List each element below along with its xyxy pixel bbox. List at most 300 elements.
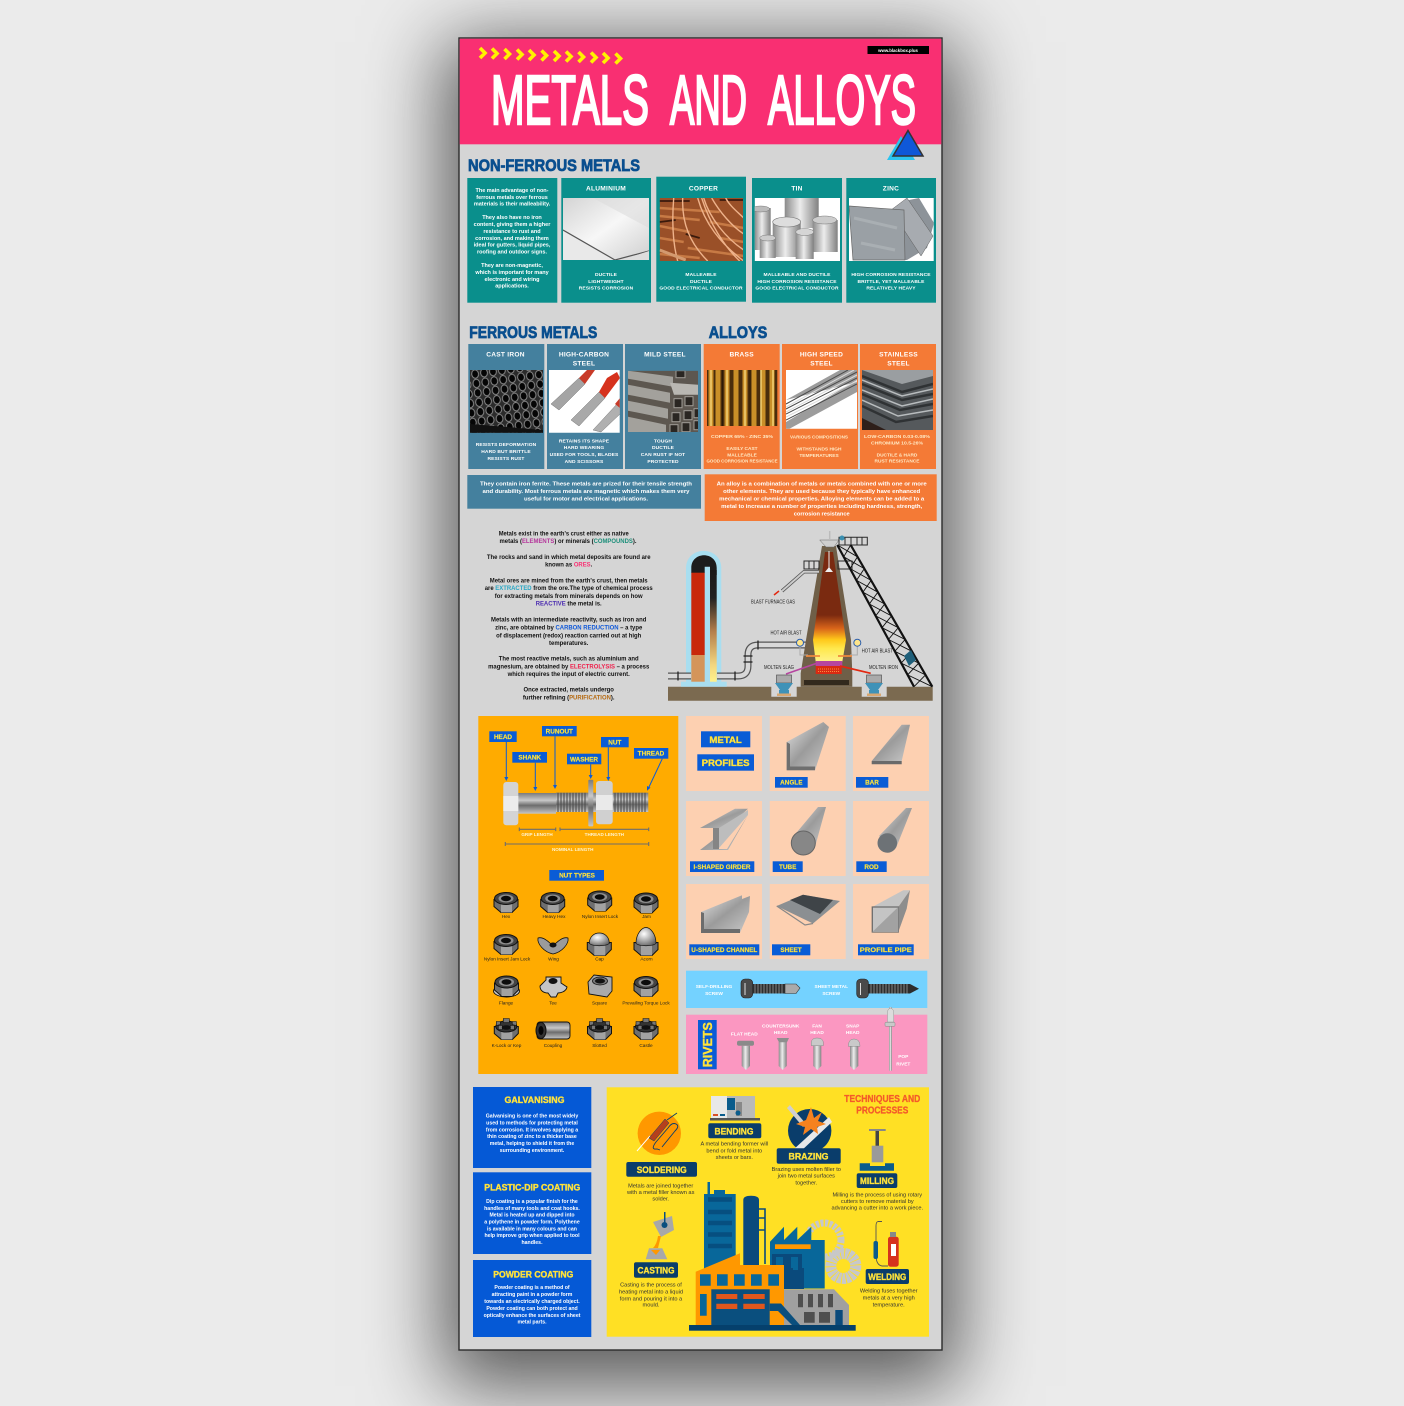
- text block: milling: [832, 1192, 924, 1212]
- label: runout: RUNOUT: [546, 728, 573, 736]
- label: shank: [512, 752, 547, 763]
- bolt illustration: [503, 780, 648, 826]
- url badge: www.blackbox.plus: [877, 48, 918, 53]
- nut: nylon insert lock: Nylon Insert Lock: [582, 914, 619, 919]
- header banner: [460, 39, 941, 144]
- nut: prevailing torque lock: [622, 976, 670, 1006]
- nut: slotted: [588, 1018, 612, 1048]
- text block: extraction of metals: known as ORES.: [545, 562, 593, 568]
- photo: copper wire: [660, 198, 743, 261]
- panel: alloy description: mechanical or chemical properties. Alloying elements can be added to a: [719, 497, 925, 503]
- panel: plastic-dip coating: a polythene in powder form. Polythene: [484, 1220, 580, 1226]
- rivet: fan head: FAN: [812, 1023, 822, 1029]
- panel: non-ferrous intro: corrosion, and making them: [475, 236, 549, 242]
- text block: extraction of metals: zinc, are obtained by CARBON REDUCTION – a type: [495, 625, 643, 631]
- panel: copper: [656, 177, 746, 302]
- nut: nylon insert jam lock: Nylon Insert Jam Lock: [484, 956, 531, 962]
- panel: cast iron: [468, 344, 544, 469]
- text block: brazing: [772, 1167, 841, 1186]
- panel: mild steel: CAN RUST IF NOT: [641, 452, 685, 458]
- text block: casting: [619, 1282, 683, 1309]
- text block: extraction of metals: [485, 531, 653, 701]
- panel: non-ferrous intro: electronic and wiring: [484, 277, 540, 283]
- text block: casting: heating metal into a liquid: [619, 1289, 683, 1295]
- panel: plastic-dip coating: [473, 1172, 591, 1254]
- panel: zinc: ZINC: [883, 186, 899, 192]
- text block: extraction of metals: The most reactive metals, such as aluminium and: [499, 656, 639, 662]
- panel: high-carbon steel: HIGH-CARBON: [559, 351, 609, 358]
- label: runout: [542, 726, 577, 736]
- rivet: countersunk head: [762, 1023, 800, 1070]
- process: casting: [634, 1262, 678, 1278]
- panel: high speed steel: HIGH SPEED: [800, 351, 843, 358]
- text block: extraction of metals: which requires the input of electric current.: [507, 672, 630, 678]
- process: soldering: [626, 1162, 697, 1177]
- label: thread length: THREAD LENGTH: [585, 832, 625, 837]
- text block: bending: [700, 1142, 768, 1161]
- panel: copper: GOOD ELECTRICAL CONDUCTOR: [659, 286, 743, 292]
- panel: stainless steel: STEEL: [887, 361, 910, 368]
- photo: stainless sheets: [862, 370, 933, 430]
- rivet: fan head: HEAD: [810, 1030, 824, 1036]
- panel: ferrous description: [467, 475, 701, 509]
- text block: bending: sheets or bars.: [716, 1155, 753, 1161]
- nut: wing: [538, 938, 568, 962]
- panel: cast iron: RESISTS DEFORMATION: [476, 442, 537, 448]
- heading: techniques and processes: [844, 1094, 920, 1116]
- process: milling: MILLING: [860, 1176, 894, 1187]
- panel: powder coating: POWDER COATING: [493, 1270, 573, 1281]
- title: METALS: [491, 61, 649, 139]
- panel: aluminium: ALUMINIUM: [586, 186, 626, 192]
- heading: non-ferrous metals: NON-FERROUS METALS: [468, 156, 640, 175]
- nut: acorn: [634, 928, 658, 962]
- text block: extraction of metals: are EXTRACTED from the ore.The type of chemical process: [485, 586, 653, 592]
- nut: heavy hex: [541, 892, 566, 919]
- nut: k-lock or kep: K-Lock or Kep: [492, 1043, 522, 1048]
- text block: welding: [860, 1289, 918, 1308]
- nut: tee: [540, 977, 567, 1006]
- blue sawtooth factory: [770, 1227, 825, 1289]
- panel: mild steel: [625, 344, 701, 469]
- panel: brass: GOOD CORROSION RESISTANCE: [706, 458, 778, 464]
- panel: non-ferrous intro: materials is their malleability.: [474, 202, 551, 208]
- profile: i-shaped girder: [686, 801, 762, 876]
- label: sheet metal screw: SHEET METAL: [815, 984, 848, 990]
- gears: [807, 1223, 856, 1278]
- text block: extraction of metals: temperatures.: [549, 641, 589, 647]
- panel: galvanising: GALVANISING: [504, 1095, 564, 1106]
- panel: ferrous description: useful for motor and electrical applications.: [524, 497, 648, 503]
- label: sheet metal screw: [815, 984, 848, 997]
- text block: milling: advancing a cutter into a work piece.: [832, 1206, 924, 1212]
- process: casting: CASTING: [638, 1266, 674, 1277]
- label: self-drilling screw: SELF-DRILLING: [696, 984, 733, 990]
- photo: chisels: [549, 370, 620, 433]
- nut: square: [588, 975, 612, 1006]
- panel: alloy description: [705, 474, 937, 521]
- silo: [743, 1196, 765, 1265]
- skip car: [904, 650, 916, 666]
- panel: ferrous description: and durability. Most ferrous metals are magnetic which makes them very: [482, 489, 690, 495]
- panel: plastic-dip coating: Dip coating is a popular finish for the: [486, 1199, 578, 1205]
- rivet: pop rivet: POP: [898, 1054, 909, 1060]
- icon: sheet metal screw: [857, 979, 919, 998]
- panel: high speed steel: VARIOUS COMPOSITIONS: [790, 434, 849, 440]
- panel: tin: [752, 178, 842, 303]
- icon: soldering iron: [637, 1112, 681, 1155]
- rivet: fan head: [810, 1023, 824, 1070]
- nut: square: Square: [592, 1000, 607, 1006]
- heading: techniques and processes: PROCESSES: [856, 1105, 909, 1116]
- rivet: countersunk head: HEAD: [774, 1030, 788, 1036]
- heading: alloys: ALLOYS: [709, 323, 767, 342]
- panel: high speed steel: STEEL: [810, 361, 833, 368]
- panel: alloy description: corrosion resistance: [794, 511, 850, 517]
- label: metal: METAL: [709, 735, 742, 746]
- text block: casting: form and pouring it into a: [620, 1296, 683, 1302]
- panel: powder coating: metal parts.: [517, 1320, 547, 1326]
- panel: non-ferrous intro: which is important for many: [474, 270, 550, 276]
- icon: milling machine: [860, 1129, 894, 1171]
- text block: casting: Casting is the process of: [620, 1282, 682, 1288]
- panel: powder coating: Powder coating is a method of: [494, 1285, 570, 1291]
- skip hoist truss: [837, 545, 932, 687]
- text block: extraction of metals: REACTIVE the metal is.: [536, 602, 602, 608]
- text block: milling: Milling is the process of using rotary: [832, 1192, 922, 1198]
- nut: hex: [494, 892, 518, 919]
- panel: non-ferrous intro: content, giving them a higher: [474, 222, 551, 228]
- panel: aluminium: LIGHTWEIGHT: [588, 279, 624, 285]
- label: profiles: PROFILES: [702, 758, 750, 769]
- label: head: [489, 731, 517, 742]
- panel: aluminium: [561, 178, 651, 303]
- rivet: snap head: HEAD: [846, 1030, 860, 1036]
- text block: extraction of metals: for extracting metals from minerals depends on how: [495, 594, 643, 600]
- panel: non-ferrous intro: resistance to rust and: [483, 229, 541, 235]
- panel: plastic-dip coating: handles.: [521, 1240, 543, 1246]
- text block: extraction of metals: Metal ores are mined from the earth's crust, then metals: [490, 578, 648, 584]
- text block: casting: mould.: [643, 1303, 660, 1309]
- panel: brass: COPPER 65% - ZINC 35%: [711, 434, 774, 440]
- heading: rivets: RIVETS: [700, 1022, 715, 1067]
- nut: slotted: Slotted: [592, 1043, 607, 1048]
- text block: soldering: solder.: [652, 1197, 669, 1203]
- panel: galvanising: thin coating of zinc to a thicker base: [487, 1134, 577, 1140]
- panel: brass: EASILY CAST: [726, 446, 758, 452]
- icon: triangles: [887, 130, 923, 160]
- text block: brazing: together.: [795, 1180, 818, 1186]
- base strip: [689, 1325, 856, 1331]
- connecting walkway: [770, 1304, 800, 1325]
- photo: aluminium sheet: [563, 198, 649, 260]
- label: bar: BAR: [865, 780, 879, 786]
- nut: jam: Jam: [642, 914, 651, 919]
- panel: non-ferrous intro: They are non-magnetic,: [481, 263, 543, 269]
- label: tube: TUBE: [779, 864, 797, 871]
- nut: tee: Tee: [549, 1000, 557, 1006]
- text block: soldering: Metals are joined together: [628, 1183, 693, 1189]
- panel: plastic-dip coating: Metal is heated up and dipped into: [489, 1212, 575, 1218]
- illustration: factory: [689, 1182, 856, 1331]
- panel: mild steel: DUCTILE: [652, 445, 675, 451]
- dimension lines: [505, 828, 649, 846]
- panel: powder coating: attracting paint in a powder form: [492, 1292, 573, 1298]
- icon: casting ladle: [646, 1212, 674, 1259]
- label: head: HEAD: [494, 734, 512, 741]
- arrows: leader lines: [504, 736, 662, 791]
- nut: castle: Castle: [639, 1043, 653, 1048]
- panel: alloy description: metal to increase a number of properties including hardness, strength,: [721, 504, 923, 510]
- process: bending: BENDING: [714, 1126, 754, 1137]
- panel: powder coating: towards an electrically charged object.: [484, 1299, 580, 1305]
- process: soldering: SOLDERING: [637, 1165, 687, 1176]
- nut: castle: [634, 1018, 658, 1048]
- panel: high-carbon steel: STEEL: [573, 361, 595, 368]
- nut: coupling: Coupling: [544, 1043, 563, 1048]
- rivet: flat head: [731, 1031, 758, 1070]
- profile: bar: [853, 716, 929, 791]
- orange building: [696, 1253, 784, 1325]
- panel: alloy description: other elements. They are used because they typically have enhanced: [723, 489, 921, 495]
- label: rod: ROD: [864, 864, 879, 871]
- rivet: pop rivet: RIVET: [896, 1061, 910, 1067]
- label: thread: THREAD: [638, 751, 665, 758]
- panel: ferrous description: They contain iron ferrite. These metals are prized for their tensile strength: [480, 481, 692, 487]
- label: self-drilling screw: [696, 984, 733, 997]
- diagram: blast furnace: [668, 531, 933, 701]
- panel: galvanising: used to methods for protecting metal: [486, 1120, 578, 1126]
- text block: bending: A metal bending former will: [700, 1142, 768, 1148]
- molten slag and iron runners: [786, 664, 816, 674]
- panel: bolt anatomy and nut types: [478, 716, 678, 1074]
- panel: brass: BRASS: [730, 351, 754, 358]
- panel: stainless steel: [860, 344, 936, 469]
- text block: brazing: Brazing uses molten filler to: [772, 1167, 841, 1173]
- nut: coupling: [536, 1022, 570, 1048]
- panel: plastic-dip coating: is available in many colours and can: [487, 1226, 577, 1232]
- nut: flange: Flange: [499, 1000, 514, 1006]
- label: blast furnace gas: BLAST FURNACE GAS: [751, 599, 796, 605]
- text block: bending: bend or fold metal into: [706, 1148, 762, 1154]
- label: nut types: NUT TYPES: [559, 873, 596, 880]
- text block: soldering: with a metal filler known as: [626, 1190, 695, 1196]
- label: nut types: [549, 870, 604, 881]
- panel: cast iron: CAST IRON: [486, 351, 525, 358]
- text block: extraction of metals: magnesium, are obtained by ELECTROLYSIS – a process: [488, 664, 650, 670]
- label: i-shaped girder: I-SHAPED GIRDER: [694, 864, 751, 871]
- label: nut: [601, 737, 629, 747]
- icon: brazing: [787, 1105, 832, 1152]
- panel: high-carbon steel: AND SCISSORS: [565, 459, 604, 465]
- nut: heavy hex: Heavy Hex: [543, 914, 566, 919]
- process: welding: [866, 1269, 909, 1284]
- panel: tin: GOOD ELECTRICAL CONDUCTOR: [755, 286, 839, 292]
- label: washer: [567, 754, 601, 764]
- label: angle: ANGLE: [780, 780, 803, 786]
- label: washer: WASHER: [570, 756, 598, 763]
- panel: mild steel: TOUGH: [654, 438, 672, 444]
- panel: stainless steel: DUCTILE & HARD: [877, 452, 918, 458]
- profile: sheet: [770, 884, 846, 959]
- panel: stainless steel: LOW-CARBON 0.03-0.08%: [864, 434, 931, 440]
- rivet: snap head: SNAP: [846, 1023, 860, 1029]
- panel: alloy description: An alloy is a combination of metals or metals combined with one or more: [717, 482, 927, 488]
- panel: metal profiles heading tile: [686, 716, 762, 791]
- text block: extraction of metals: metals (ELEMENTS) or minerals (COMPOUNDS).: [500, 539, 637, 545]
- text block: welding: metals at a very high: [863, 1296, 915, 1302]
- gas offtake: [782, 572, 819, 591]
- panel: galvanising: [473, 1087, 591, 1168]
- title: ALLOYS: [768, 61, 916, 139]
- nut: acorn: Acorn: [640, 956, 653, 962]
- nut: cap: [587, 933, 611, 962]
- panel: high speed steel: WITHSTANDS HIGH: [797, 446, 842, 452]
- panel: aluminium: DUCTILE: [595, 272, 618, 278]
- nut: flange: [494, 976, 520, 1006]
- heading: ferrous metals: FERROUS METALS: [469, 323, 597, 342]
- icon: self-drilling screw: [741, 979, 800, 998]
- text block: welding: temperature.: [873, 1302, 905, 1308]
- label: profile pipe: PROFILE PIPE: [860, 947, 913, 954]
- panel: non-ferrous intro: [467, 178, 557, 303]
- gray building: [784, 1289, 849, 1325]
- nut: nylon insert jam lock: [484, 934, 531, 962]
- label: hot air blast right: HOT AIR BLAST: [862, 649, 893, 655]
- photo: brass rods: [707, 370, 778, 426]
- title: [491, 61, 916, 139]
- panel: zinc: BRITTLE, YET MALLEABLE: [858, 279, 925, 285]
- panel: non-ferrous intro: The main advantage of non-: [475, 188, 549, 194]
- label: u-shaped channel: U-SHAPED CHANNEL: [691, 947, 757, 954]
- panel: non-ferrous intro: applications.: [495, 284, 529, 290]
- panel: zinc: [846, 178, 936, 303]
- text block: extraction of metals: The rocks and sand in which metal deposits are found are: [487, 555, 651, 561]
- poster background: [459, 38, 942, 1350]
- panel: powder coating: [473, 1260, 591, 1337]
- tall tower: [704, 1182, 736, 1270]
- panel: high speed steel: [782, 344, 858, 469]
- panel: brass: MALLEABLE: [727, 452, 758, 458]
- text block: extraction of metals: Metals with an intermediate reactivity, such as iron and: [491, 617, 647, 623]
- nut: k-lock or kep: [492, 1018, 522, 1048]
- label: molten iron: MOLTEN IRON: [869, 665, 898, 671]
- label: molten slag: MOLTEN SLAG: [764, 665, 794, 671]
- profile: angle: [770, 716, 846, 791]
- label: hot air blast left: HOT AIR BLAST: [770, 631, 802, 637]
- nut: cap: Cap: [595, 956, 604, 962]
- label: grip length: GRIP LENGTH: [521, 832, 553, 837]
- label: nominal length: NOMINAL LENGTH: [552, 847, 594, 852]
- panel: cast iron: RESISTS RUST: [487, 456, 525, 462]
- panel: copper: COPPER: [689, 186, 718, 192]
- panel: zinc: HIGH CORROSION RESISTANCE: [851, 272, 931, 278]
- panel: galvanising: surrounding environment.: [500, 1148, 565, 1154]
- text block: soldering: [626, 1183, 695, 1203]
- profile: rod: [853, 801, 929, 876]
- railings: [804, 537, 867, 569]
- panel: tin: TIN: [791, 186, 803, 192]
- text block: milling: cutters to remove material by: [841, 1199, 914, 1205]
- photo: cast iron pipes: [470, 370, 543, 433]
- panel: high-carbon steel: RETAINS ITS SHAPE: [559, 438, 610, 444]
- panel: high-carbon steel: [547, 344, 623, 469]
- panel: non-ferrous intro: ideal for gutters, liquid pipes,: [474, 242, 551, 248]
- panel: galvanising: Galvanising is one of the most widely: [486, 1114, 578, 1120]
- profile: tube: [770, 801, 846, 876]
- panel: powder coating: optically enhance the surfaces of sheet: [484, 1313, 581, 1319]
- photo: zinc sheets: [849, 198, 934, 261]
- text block: extraction of metals: further refining (PURIFICATION).: [523, 695, 615, 701]
- hot blast stove: [681, 551, 727, 687]
- rivet: countersunk head: COUNTERSUNK: [762, 1023, 800, 1029]
- rivet: pop rivet: [885, 1007, 910, 1071]
- photo: steel bars: [786, 370, 857, 429]
- panel: plastic-dip coating: PLASTIC-DIP COATING: [484, 1183, 580, 1194]
- panel: brass: [704, 344, 780, 469]
- text block: extraction of metals: Once extracted, metals undergo: [523, 688, 614, 694]
- panel: tin: MALLEABLE AND DUCTILE: [764, 272, 831, 278]
- url badge: [868, 46, 929, 54]
- hot air pipework: [668, 645, 806, 676]
- panel: aluminium: RESISTS CORROSION: [579, 286, 634, 292]
- nut: wing: Wing: [548, 956, 559, 962]
- text block: extraction of metals: of displacement (redox) reaction carried out at high: [496, 633, 642, 639]
- panel: non-ferrous intro: roofing and outdoor signs.: [477, 250, 547, 256]
- panel: mild steel: PROTECTED: [647, 459, 679, 465]
- icon: bending machine: [710, 1096, 760, 1120]
- panel: screws: [686, 971, 927, 1008]
- panel: stainless steel: STAINLESS: [879, 351, 918, 358]
- title: AND: [670, 61, 747, 139]
- photo: tin cans: [754, 198, 840, 261]
- process: brazing: BRAZING: [788, 1152, 828, 1163]
- panel: high-carbon steel: HARD WEARING: [564, 445, 604, 451]
- panel: stainless steel: RUST RESISTANCE: [875, 458, 920, 464]
- label: shank: SHANK: [518, 755, 541, 762]
- panel: copper: MALLEABLE: [685, 272, 717, 278]
- panel: galvanising: from corrosion. It involves applying a: [486, 1128, 578, 1134]
- ladle right: [865, 675, 883, 696]
- panel: copper: DUCTILE: [690, 279, 713, 285]
- panel: tin: HIGH CORROSION RESISTANCE: [757, 279, 837, 285]
- nut: jam: [634, 893, 658, 919]
- panel: high speed steel: TEMPERATURES: [799, 453, 839, 459]
- panel: mild steel: MILD STEEL: [644, 351, 686, 358]
- ladle left: [775, 675, 793, 696]
- process: milling: [857, 1173, 897, 1188]
- label: sheet metal screw: SCREW: [822, 991, 841, 997]
- panel: zinc: RELATIVELY HEAVY: [866, 286, 916, 292]
- heading: techniques and processes: TECHNIQUES AND: [844, 1094, 920, 1105]
- ground: [668, 687, 933, 701]
- text block: welding: Welding fuses together: [860, 1289, 918, 1295]
- tuyeres and blast rings: [796, 639, 861, 656]
- panel: non-ferrous intro: ferrous metals over ferrous: [476, 195, 548, 201]
- icon: welding torch and cylinder: [874, 1222, 899, 1267]
- photo: steel box sections: [628, 370, 698, 432]
- furnace body: [801, 531, 852, 687]
- panel: galvanising: metal, helping to shield it from the: [490, 1141, 574, 1147]
- nut: hex: Hex: [502, 914, 511, 919]
- panel: powder coating: Powder coating can both protect and: [486, 1306, 578, 1312]
- panel: rivets: [686, 1007, 927, 1074]
- panel: plastic-dip coating: help improve grip when applied to tool: [484, 1233, 580, 1239]
- panel: high-carbon steel: USED FOR TOOLS, BLADES: [550, 452, 619, 458]
- label: sheet: SHEET: [780, 947, 802, 954]
- chevron row: [480, 48, 620, 64]
- panel: plastic-dip coating: handles of many tools and coat hooks.: [484, 1206, 580, 1212]
